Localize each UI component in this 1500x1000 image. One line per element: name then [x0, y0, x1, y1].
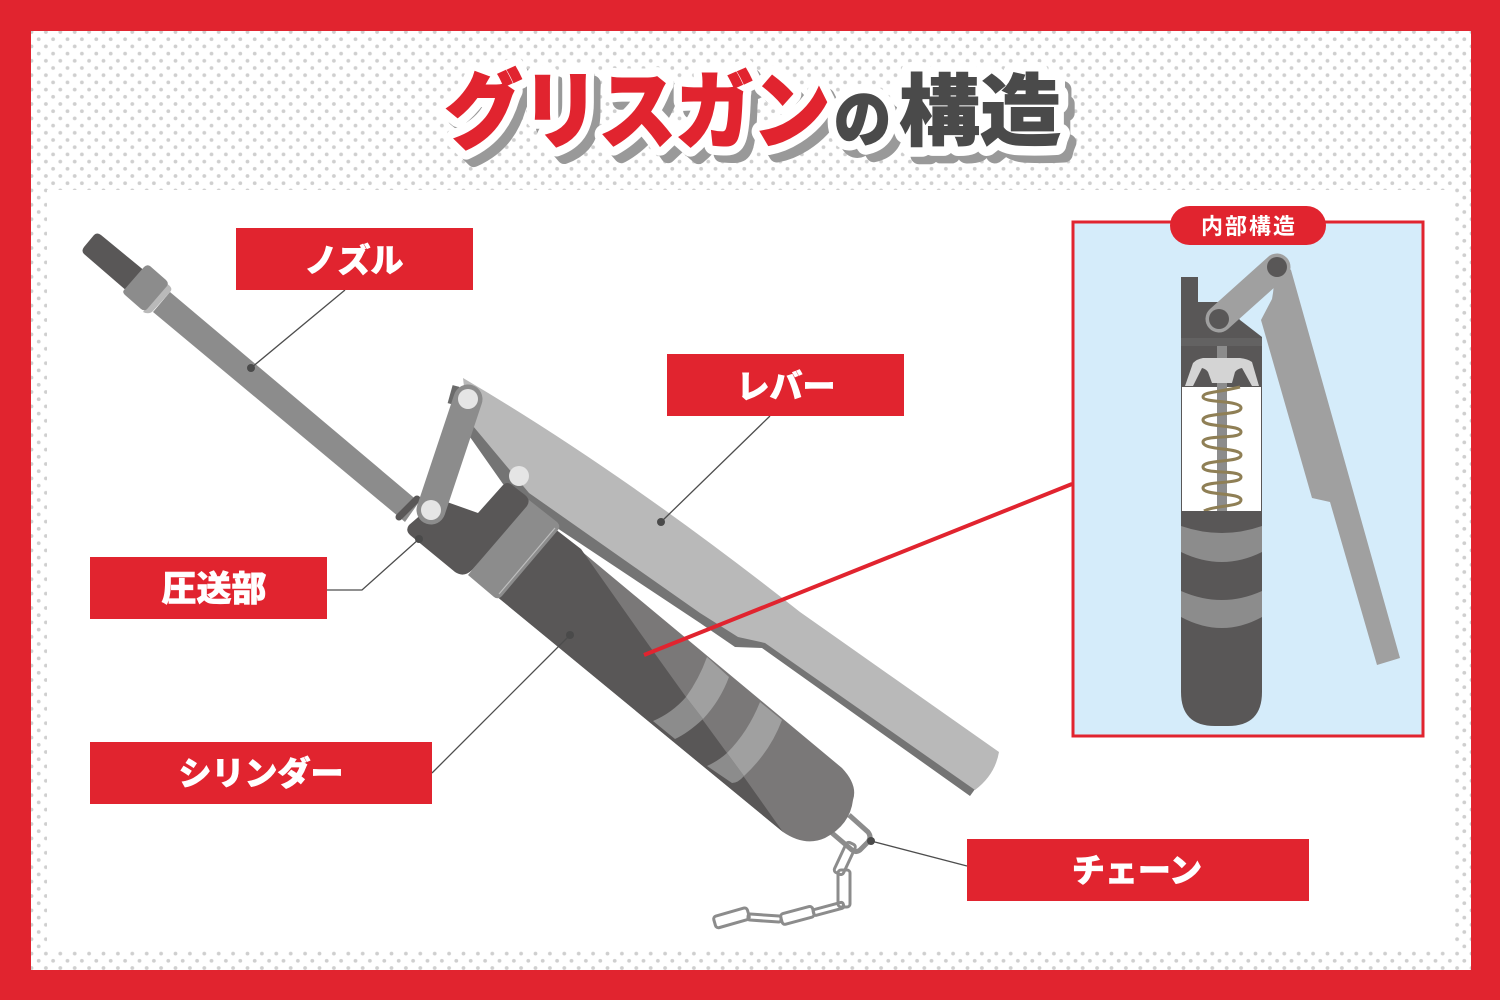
lever	[463, 378, 999, 790]
cylinder	[495, 525, 854, 841]
label: chain: チェーン	[1072, 852, 1202, 889]
label: nozzle: ノズル	[304, 242, 404, 279]
title: グリスガン	[445, 65, 830, 159]
title: グリスガン	[453, 74, 838, 168]
label: lever	[657, 354, 904, 526]
label: lever: レバー	[736, 368, 836, 405]
title: の	[834, 86, 891, 155]
title: 構造	[899, 68, 1061, 156]
inset badge	[1170, 206, 1326, 245]
title: の	[842, 95, 899, 164]
nozzle collar	[123, 265, 171, 313]
lever underside	[468, 415, 978, 796]
label: chain	[867, 837, 1309, 901]
label: cylinder: シリンダー	[178, 755, 344, 792]
label: nozzle	[236, 228, 473, 372]
title: グリスガン	[445, 65, 830, 159]
inset badge: 内部構造	[1201, 214, 1297, 239]
nozzle tip	[82, 234, 146, 292]
link arm	[421, 386, 478, 520]
label: pump section	[90, 535, 423, 619]
callout line to inset	[644, 484, 1072, 655]
nozzle tube	[153, 292, 419, 522]
inset link	[1209, 257, 1287, 329]
inset lever	[1261, 258, 1400, 665]
title	[445, 65, 1069, 168]
lever pin	[509, 466, 529, 486]
collar	[468, 500, 559, 598]
chain	[713, 815, 870, 928]
title: 構造	[907, 77, 1069, 165]
pump head	[407, 483, 529, 575]
title: 構造	[899, 68, 1061, 156]
label: pump section: 圧送部	[161, 570, 267, 609]
inset gun body	[1181, 277, 1262, 726]
tube ring	[399, 499, 417, 517]
title: の	[834, 86, 891, 155]
grease gun illustration	[82, 234, 999, 928]
label: cylinder	[90, 631, 574, 804]
panel: internal structure	[1073, 206, 1423, 736]
